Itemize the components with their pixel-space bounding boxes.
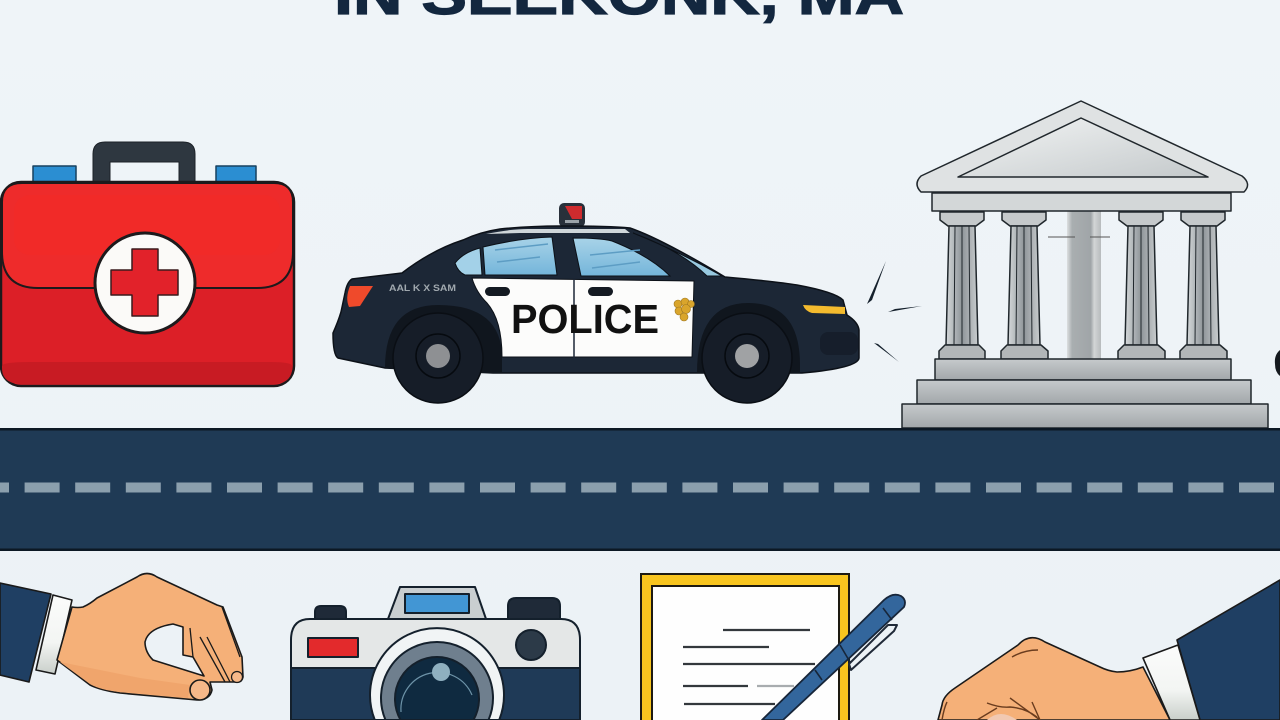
- road centre dashes: [0, 482, 1280, 492]
- headlight: [803, 305, 845, 314]
- roof highlight: [486, 229, 630, 234]
- rear small text: AAL K X SAM: [389, 283, 456, 293]
- rear wheel: [385, 305, 502, 403]
- icon: left hand with sleeve: [0, 574, 243, 700]
- column 1: [939, 212, 985, 359]
- column 3: [1118, 212, 1165, 359]
- icon: police car: [333, 203, 859, 403]
- central column: [1067, 211, 1101, 359]
- window glints: [495, 244, 640, 268]
- front wheel: [697, 303, 800, 403]
- roof light: [559, 203, 585, 227]
- dark shape at right edge: [1275, 350, 1280, 376]
- icon: pen: [762, 595, 905, 720]
- icon: first aid kit: [1, 142, 294, 386]
- steps: [935, 359, 1231, 380]
- icon: courthouse: [902, 101, 1268, 428]
- door handles: [485, 287, 613, 296]
- entablature: [932, 193, 1231, 211]
- white door panel: [472, 278, 694, 357]
- road: [0, 428, 1280, 551]
- column 4: [1180, 212, 1227, 359]
- grille: [820, 332, 858, 355]
- pediment: [917, 101, 1248, 192]
- police lettering: POLICE: [511, 296, 659, 342]
- icon: impact motion lines: [867, 261, 922, 362]
- icon: clipboard with document: [641, 574, 849, 720]
- icon: camera: [291, 587, 580, 720]
- car body: [333, 226, 859, 373]
- column 2: [1001, 212, 1048, 359]
- door divider: [573, 279, 575, 358]
- windows: [455, 233, 722, 276]
- icon: right hand with sleeve: [938, 580, 1280, 720]
- tail light: [347, 286, 373, 307]
- document lines: [683, 630, 815, 704]
- badge: [674, 298, 694, 321]
